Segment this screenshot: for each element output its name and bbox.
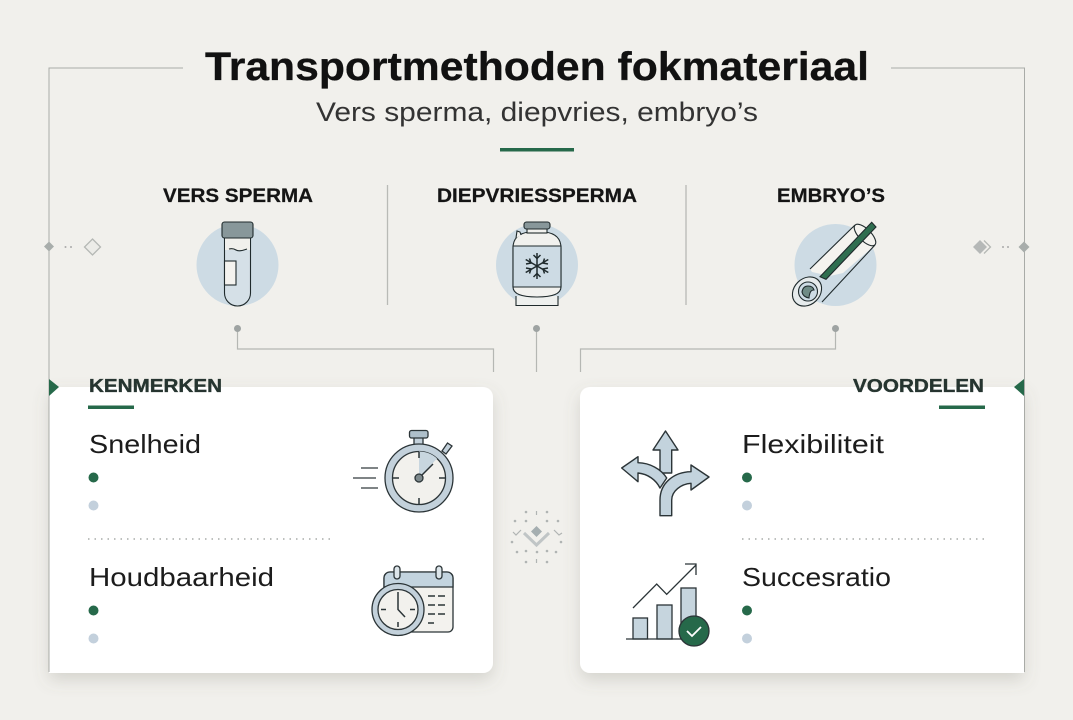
heading: kenmerken: KENMERKEN — [89, 376, 222, 396]
divider — [88, 538, 332, 540]
marker: voordelen — [1014, 379, 1024, 396]
item: succesratio — [742, 562, 891, 644]
icon: test tube — [196, 222, 278, 306]
item: houdbaarheid — [88, 562, 274, 644]
side ornament: right — [973, 240, 1030, 254]
panel: voordelen — [580, 376, 1024, 673]
column: diepvriessperma — [437, 185, 637, 306]
marker: kenmerken — [49, 379, 59, 396]
icon: calendar and clock — [372, 566, 453, 636]
icon: branching arrows — [622, 431, 709, 516]
icon: embryo straw — [786, 221, 879, 312]
heading: voordelen: VOORDELEN — [853, 376, 984, 396]
icon: stopwatch — [353, 430, 453, 512]
item: snelheid: Snelheid — [89, 429, 201, 459]
center ornament — [511, 511, 562, 563]
heading: embryo's: EMBRYO’S — [777, 185, 885, 207]
title accent line — [500, 148, 574, 152]
column: vers sperma — [163, 185, 313, 306]
heading: diepvriessperma: DIEPVRIESSPERMA — [437, 185, 637, 207]
side ornament: left — [44, 239, 100, 255]
icon: cryo tank — [496, 222, 578, 306]
item: flexibiliteit — [742, 429, 885, 510]
panel: kenmerken — [49, 376, 493, 673]
divider — [742, 538, 986, 540]
column: embryo's — [777, 185, 885, 312]
item: succesratio: Succesratio — [742, 562, 891, 592]
item: flexibiliteit: Flexibiliteit — [742, 429, 885, 459]
heading: vers sperma: VERS SPERMA — [163, 185, 313, 207]
item: houdbaarheid: Houdbaarheid — [89, 562, 274, 592]
item: snelheid — [88, 429, 201, 510]
subtitle: Vers sperma, diepvries, embryo’s — [316, 97, 758, 127]
title: Transportmethoden fokmateriaal — [205, 45, 869, 89]
connectors — [234, 325, 839, 372]
icon: bar chart with check — [626, 564, 709, 646]
